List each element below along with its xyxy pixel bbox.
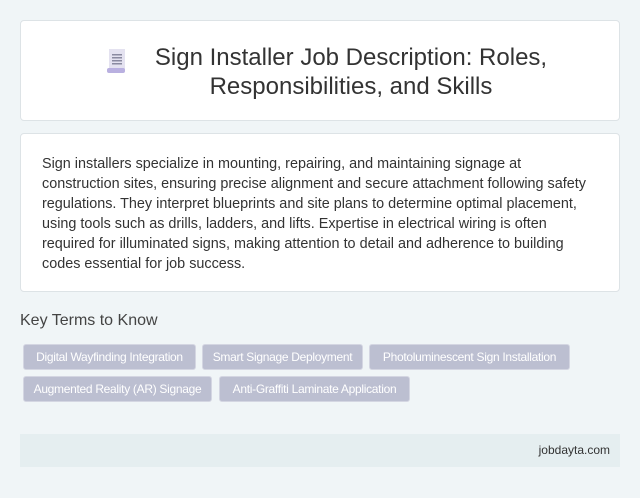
tag 5	[219, 376, 410, 402]
footer source: jobdayta.com	[539, 443, 610, 457]
title: Sign Installer Job Description: Roles, Responsibilities, and Skills	[155, 44, 547, 100]
footer	[20, 434, 620, 467]
tag 4: Augmented Reality (AR) Signage	[34, 382, 201, 396]
tag 3	[369, 344, 570, 370]
description text: construction sites, ensuring precise alignment and secure attachment following safety	[42, 176, 586, 192]
description text: codes essential for job success.	[42, 256, 245, 272]
header card	[20, 20, 620, 121]
description text	[42, 156, 586, 272]
description text: Sign installers specialize in mounting, repairing, and maintaining signage at	[42, 156, 521, 172]
tag 2: Smart Signage Deployment	[213, 350, 352, 364]
key terms heading: Key Terms to Know	[20, 312, 158, 329]
tag 3: Photoluminescent Sign Installation	[383, 350, 556, 364]
icon: document	[107, 49, 125, 73]
description text: regulations. They interpret blueprints and site plans to determine optimal placement,	[42, 196, 577, 212]
tag 1: Digital Wayfinding Integration	[36, 350, 183, 364]
tag 4	[23, 376, 212, 402]
description text: required for illuminated signs, making attention to detail and adherence to building	[42, 236, 564, 252]
tag 2	[202, 344, 363, 370]
tag 5: Anti-Graffiti Laminate Application	[233, 382, 396, 396]
tag 1	[23, 344, 196, 370]
description card	[20, 133, 620, 292]
description text: using tools such as drills, ladders, and lifts. Expertise in electrical wiring is often	[42, 216, 547, 232]
